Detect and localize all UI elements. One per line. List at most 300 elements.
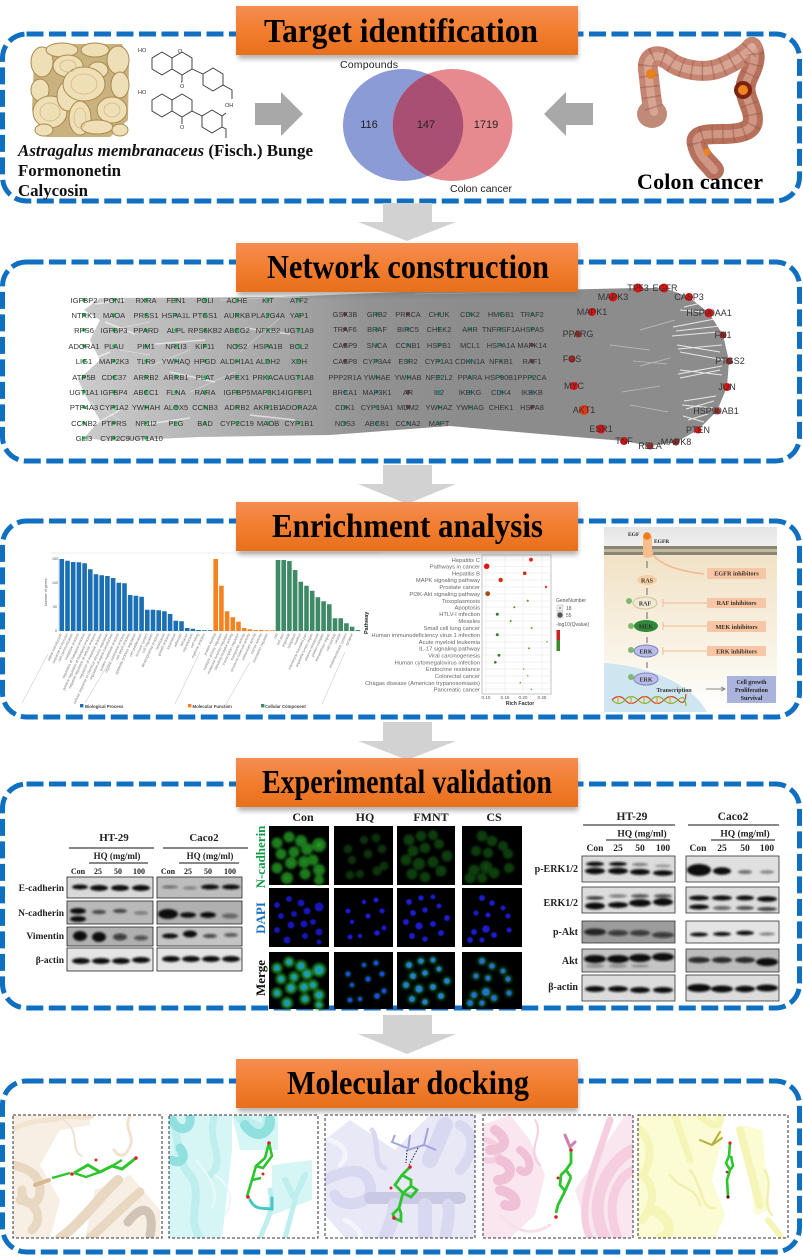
bubble chart: KEGG pathways: 0.25 [538, 695, 547, 700]
gene labels: compounds block: IGFBP5 [223, 388, 251, 397]
heading: Experimental validation: Experimental validation [262, 764, 552, 801]
western blot: ERK and Akt signalling: 50 [740, 844, 750, 854]
gene labels: compounds block: NFKB2 [256, 326, 280, 335]
bar chart: GO enrichment: 50 [53, 605, 57, 609]
western blot: EMT markers: 50 [204, 867, 212, 876]
chemical structures: formononetin and calycosin: HO [138, 48, 147, 54]
gene labels: middle block: TRAF6 [333, 325, 357, 334]
heading: Molecular docking [236, 1059, 578, 1112]
gene labels: middle block: CASP8 [333, 357, 357, 366]
bubble legend [556, 598, 589, 628]
bars: molecular function [213, 559, 275, 631]
gene labels: compounds block: IGFBP3 [100, 326, 128, 335]
gene labels: compounds block: PLA2G4A [251, 311, 286, 320]
gene labels: middle block: BRCA1 [333, 388, 357, 397]
gene nodes: middle block [345, 314, 532, 423]
immunofluorescence grid: Merge [253, 960, 268, 996]
western blot: EMT markers: HT-29 [99, 832, 129, 844]
gene labels: compounds block: ATP5B [72, 373, 96, 382]
gene labels: compounds block: ATF2 [290, 296, 308, 305]
gene labels: compounds block: UGT1A1 [69, 388, 99, 397]
chemical structures: formononetin and calycosin: OH [225, 103, 233, 109]
heading: Network construction [236, 243, 578, 296]
gene labels: compounds block: NOS2 [227, 342, 247, 351]
axis category labels: adhesion [173, 633, 183, 648]
bubble chart: KEGG pathways: 0.15 [501, 695, 510, 700]
pathway diagram: EGFR signalling: Survival [741, 696, 763, 702]
gene labels: middle block: YWHAZ [426, 403, 453, 412]
gene labels: middle block: CHUK [429, 310, 450, 319]
arrow: right [255, 92, 303, 136]
photo: Astragalus slices [31, 43, 129, 137]
gene labels: compounds block: YAP1 [290, 311, 308, 320]
axis category labels: organelle lumen region [295, 633, 314, 668]
axis category labels: cell death process [115, 633, 131, 661]
western blot: EMT markers: 25 [184, 867, 192, 876]
gene labels: compounds block: PIM1 [137, 342, 155, 351]
pathway diagram: EGFR signalling: ERK inhibitors [716, 648, 757, 656]
axis category labels: endomembrane system [328, 633, 348, 668]
bubble chart: KEGG pathways: Chagas disease (American trypanosomiasis) [365, 681, 480, 687]
chemical structures: formononetin and calycosin [138, 48, 233, 138]
western blot: ERK and Akt signalling: 100 [760, 844, 774, 854]
heading: Target identification [236, 6, 578, 59]
western blot: EMT markers: E-cadherin [19, 884, 65, 894]
western blot: ERK and Akt signalling: 100 [656, 844, 670, 854]
axis category labels: cell communication [57, 633, 74, 662]
gene labels: middle block: MAPT [429, 419, 450, 428]
western blot: EMT markers: Con [71, 867, 86, 876]
gene labels: compounds block: ADRB2 [224, 403, 250, 412]
network graph [68, 283, 745, 451]
bubble legend: 18 [566, 606, 572, 612]
axis category labels: synapse [345, 633, 354, 647]
axis category labels: organic substance process [104, 633, 126, 673]
axis category labels: carrier activity [250, 633, 263, 655]
bubble chart: KEGG pathways: MAPK signaling pathway [416, 578, 480, 584]
gene labels: compounds block: HSPA1L [162, 311, 190, 320]
bars: biological process [60, 559, 212, 631]
gene labels: compounds block: BAD [197, 419, 213, 428]
axis category labels: negative regulation of cellular process [68, 633, 97, 689]
arrow: transcription to outcome [706, 687, 725, 691]
panel: molecular docking [2, 1081, 800, 1252]
immunofluorescence grid: FMNT [413, 810, 449, 824]
hub gene labels: HSP90AA1 [686, 308, 732, 318]
gene labels: compounds block: PTPRS [101, 419, 127, 428]
axis category labels: cellular response to chemical stimulus regulation [73, 633, 109, 704]
gene labels: compounds block: TLR9 [137, 357, 155, 366]
gene labels: middle block: CYP1A1 [425, 357, 453, 366]
arrow: enrichment to validation [358, 722, 456, 760]
gene labels: middle block: YWHAB [394, 373, 422, 382]
bubble chart: KEGG pathways: Small cell lung cancer [424, 626, 480, 632]
signalling nodes: RAS [641, 578, 654, 584]
western blot: ERK and Akt signalling: HT-29 [617, 811, 648, 823]
axis category labels: vesicle [334, 633, 342, 644]
hub gene labels: JUN [718, 382, 736, 392]
gene labels: middle block: MDM2 [397, 403, 419, 412]
western blot: EMT markers: N-cadherin [18, 909, 65, 919]
bubble chart: KEGG pathways: Apoptosis [455, 606, 480, 612]
pathway diagram: EGFR signalling: Cell growth [736, 680, 767, 686]
arrow: left [544, 92, 593, 136]
heading: Enrichment analysis [236, 502, 578, 555]
bubble chart: KEGG pathways: IL-17 signaling pathway [419, 646, 480, 652]
gene labels: compounds block: ABCG2 [224, 326, 250, 335]
axis category labels: transporter activity [230, 633, 246, 661]
hub gene labels: MAPK3 [598, 292, 628, 302]
gene labels: compounds block: ARRB2 [133, 373, 159, 382]
label: Colon cancer: Colon cancer [637, 169, 763, 194]
signalling nodes: MEK [639, 624, 653, 630]
signalling nodes: ERK [639, 678, 653, 684]
axis category labels [47, 632, 354, 704]
gene labels: compounds block: UGT1A8 [284, 373, 314, 382]
row: DAPI [274, 894, 512, 944]
gene labels: middle block: CYP3A4 [363, 357, 391, 366]
arrow: validation to docking [358, 1015, 456, 1054]
row: Merge [274, 958, 512, 1008]
gene labels: compounds block: IGFBP2 [70, 296, 98, 305]
gene labels: compounds block: MAP2K3 [99, 357, 129, 366]
signalling nodes: Transcription [656, 688, 692, 694]
gene labels: compounds block: ADORA1 [68, 342, 100, 351]
hub gene labels: HSP90AB1 [693, 406, 739, 416]
gene labels: compounds block: UGT1A10 [129, 434, 163, 443]
gene labels: compounds block: AKR1B1 [253, 403, 283, 412]
axis category labels: nucleus [293, 633, 302, 646]
axis category labels: positive regulation of biological process [62, 633, 92, 691]
gene labels: middle block: NFE2L2 [425, 373, 453, 382]
gene labels: middle block: AR [403, 388, 413, 397]
western blot: ERK and Akt signalling: Con [587, 844, 604, 854]
hub gene labels: PTEN [686, 425, 710, 435]
bubble chart: KEGG pathways: PI3K-Akt signaling pathway [409, 592, 480, 598]
venn diagram: 1719 [474, 119, 498, 131]
gene labels: compounds block: PLG [168, 419, 184, 428]
gene labels: compounds block: GLI3 [76, 434, 92, 443]
gene nodes: compounds block [84, 300, 299, 438]
immunofluorescence grid: Con [292, 810, 314, 824]
gene labels: middle block: TNFRSF1A [482, 325, 520, 334]
western blot: EMT markers: 100 [133, 867, 145, 876]
gene labels: middle block: MAPK14 [517, 341, 547, 350]
axis category labels: plasma membrane [304, 633, 320, 661]
gene labels: compounds block [68, 296, 318, 443]
docking pose 2 [169, 1115, 318, 1238]
legend: Molecular Function [192, 704, 232, 709]
western blot: ERK and Akt signalling [535, 811, 779, 1001]
bubble chart: KEGG pathways: Acute myeloid leukemia [419, 640, 481, 646]
axis category labels: organelle [281, 633, 291, 648]
pathway diagram: EGFR signalling: RAF inhibitors [717, 600, 757, 607]
pathway diagram: EGFR signalling [604, 527, 777, 712]
hub gene labels: TNF [615, 436, 633, 446]
gene labels: middle block: CDK4 [491, 388, 511, 397]
gene labels: compounds block: PPARD [133, 326, 159, 335]
gene labels: middle block: CDK2 [460, 310, 480, 319]
nucleus [604, 663, 707, 712]
gene labels: compounds block: MAOA [103, 311, 126, 320]
bubble legend: GeneNumber [556, 598, 586, 604]
gene labels: middle block [328, 310, 547, 428]
gene labels: middle block: IKBKB [521, 388, 543, 397]
gene labels: middle block: CCNA2 [395, 419, 421, 428]
gene labels: compounds block: YWHAH [132, 403, 160, 412]
gene labels: middle block: YWHAE [363, 373, 391, 382]
axis category labels: regulation of signal transduction [89, 633, 114, 680]
gene labels: middle block: HSPA8 [520, 403, 544, 412]
axis category labels: translation regulator [252, 632, 269, 663]
arrow: network to enrichment [358, 465, 456, 504]
hub gene labels: ESR1 [589, 424, 613, 434]
gene labels: middle block: YWHAG [456, 403, 484, 412]
bubble chart: KEGG pathways: Viral carcinogenesis [428, 654, 480, 660]
gene labels: compounds block: ARRB1 [163, 373, 189, 382]
bubble chart: KEGG pathways: Hepatitis B [452, 572, 480, 578]
axis category labels: developmental process [141, 633, 160, 668]
gene labels: compounds block: RPS6 [74, 326, 94, 335]
western blot: EMT markers: 50 [114, 867, 122, 876]
outcome box [727, 676, 776, 703]
gene labels: middle block: MAP3K1 [362, 388, 392, 397]
receptor [643, 536, 652, 558]
axis category labels: reproduction [182, 633, 194, 653]
hub gene labels: FOS [563, 354, 581, 364]
bar chart: GO enrichment: Number of genes [44, 578, 48, 606]
arrow: target identification to network [358, 203, 456, 241]
gene labels: compounds block: ALOX5 [164, 403, 188, 412]
axis category labels: rhythmic process [191, 633, 206, 659]
gene labels: compounds block: ACHE [226, 296, 248, 305]
gene labels: compounds block: MAP3K14 [251, 388, 285, 397]
gene labels: compounds block: IGFBP4 [100, 388, 128, 397]
bubble chart: KEGG pathways: Endocrine resistance [426, 667, 480, 673]
axis category labels: locomotion [166, 633, 177, 650]
gene labels: compounds block: AURKB [224, 311, 250, 320]
species and compound names: Astragalus membranaceus (Fisch.) Bunge [17, 141, 313, 160]
axis category labels: apoptotic process regulation [114, 633, 137, 675]
axis category labels: extracellular region [314, 633, 331, 662]
hub gene labels: TP53 [627, 283, 649, 293]
gene labels: compounds block: NR1I3 [165, 342, 187, 351]
gene labels: compounds block: HSPA1B [253, 342, 283, 351]
bubble chart: KEGG pathways: Measles [458, 619, 480, 625]
axis category labels: protein binding [203, 633, 217, 656]
gene labels: compounds block: KIF11 [195, 342, 215, 351]
legend [80, 704, 306, 709]
panel: network construction [2, 262, 800, 461]
bubble chart: KEGG pathways [364, 555, 589, 707]
immunofluorescence grid [253, 810, 522, 1009]
gene labels: compounds block: IGFBP1 [285, 388, 313, 397]
hub gene nodes [568, 284, 732, 450]
gene labels: compounds block: FEN1 [166, 296, 186, 305]
gene labels: middle block: SNCA [367, 341, 387, 350]
gene labels: middle block: ESR2 [398, 357, 418, 366]
heading: Network construction: Network construction [267, 249, 549, 286]
hub gene labels: CASP3 [674, 292, 704, 302]
gene labels: compounds block: PRSS1 [134, 311, 158, 320]
docking pose 1 [13, 1115, 162, 1238]
gene labels: compounds block: PTGS1 [193, 311, 217, 320]
gene labels: middle block: IL2 [434, 388, 444, 397]
venn diagram: 116 [360, 119, 378, 131]
bar chart: GO enrichment: 0 [55, 629, 57, 633]
docking pose 5 [638, 1115, 788, 1238]
western blot: EMT markers: HQ (mg/ml) [187, 851, 233, 861]
gene labels: compounds block: PTP4A3 [70, 403, 98, 412]
bar chart: GO enrichment [22, 553, 381, 709]
pathway diagram: EGFR signalling: EGF [628, 532, 640, 538]
gene labels: compounds block: CYP2C19 [220, 419, 254, 428]
axis category labels: behavior [179, 632, 189, 647]
signalling nodes: ERK [639, 650, 653, 656]
gene labels: compounds block: ABCC1 [133, 388, 159, 397]
panel: experimental validation [2, 784, 800, 1009]
bubble chart: KEGG pathways: 0.10 [482, 695, 491, 700]
gene labels: compounds block: CDC37 [102, 373, 126, 382]
axis category labels: transcription regulator [222, 632, 240, 666]
gene labels: middle block: IKBKG [459, 388, 482, 397]
axis category labels: metabolic process [64, 633, 80, 661]
gene labels: middle block: NOS3 [335, 419, 355, 428]
gene labels: compounds block: PLAU [104, 342, 124, 351]
axis category labels: catalytic activity regulator [202, 632, 223, 671]
western blot: EMT markers: β-actin [36, 956, 65, 966]
bubble chart: KEGG pathways: 0.20 [519, 695, 528, 700]
bubble chart: KEGG pathways: Human cytomegalovirus infection [395, 660, 480, 666]
gene labels: compounds block: CYP1A2 [99, 403, 129, 412]
gene labels: middle block: GSK3B [333, 310, 357, 319]
gene labels: middle block: ABCB1 [365, 419, 389, 428]
western blot: ERK and Akt signalling: Con [690, 844, 707, 854]
gene labels: middle block: CDK1 [335, 403, 355, 412]
gene labels: middle block: CYP19A1 [361, 403, 393, 412]
western blot: ERK and Akt signalling: HQ (mg/ml) [720, 828, 770, 840]
gene labels: middle block: NFKB1 [489, 357, 513, 366]
hub gene labels: MYC [564, 381, 584, 391]
bubble chart: KEGG pathways: Human immunodeficiency virus 1 infection [371, 633, 480, 639]
western blot: ERK and Akt signalling: HQ (mg/ml) [617, 828, 667, 840]
bubble chart: KEGG pathways: Pancreatic cancer [434, 688, 480, 694]
bubble chart: KEGG pathways: Colorectal cancer [435, 674, 480, 680]
gene labels: middle block: RAF1 [523, 357, 541, 366]
bubble chart: KEGG pathways: HTLV-I infection [439, 612, 480, 618]
axis category labels: antioxidant activity [241, 633, 257, 661]
gene labels: middle block: PPP2CA [517, 373, 547, 382]
gene labels: compounds block: ADORA2A [281, 403, 318, 412]
gene labels: compounds block: YWHAQ [162, 357, 190, 366]
western blot: EMT markers: Con [161, 867, 176, 876]
heading: Target identification: Target identification [264, 13, 538, 50]
axis category labels: cell killing [190, 633, 200, 648]
DNA helix [612, 694, 686, 706]
immunofluorescence grid: CS [486, 810, 502, 824]
gene labels: middle block: PPP2R1A [328, 373, 362, 382]
inhibitor boxes [707, 568, 766, 656]
axis category labels: protein metabolic process [99, 633, 120, 672]
bubble chart: KEGG pathways: Pathways in cancer [430, 564, 480, 570]
gene labels: compounds block: BCL2 [290, 342, 308, 351]
chemical structures: formononetin and calycosin: HO [138, 90, 147, 96]
western blot: EMT markers: Vimentin [26, 932, 65, 942]
bar chart: GO enrichment: 100 [52, 581, 58, 585]
bubble chart: KEGG pathways: Rich Factor [506, 701, 534, 707]
gene labels: middle block: PPARA [458, 373, 482, 382]
gene labels: middle block: MCL1 [460, 341, 480, 350]
axis category labels: immune system [135, 633, 149, 657]
western blot: ERK and Akt signalling: Caco2 [718, 811, 749, 823]
bubble legend: 55 [566, 613, 572, 619]
hub gene labels [563, 283, 745, 451]
chemical structures: formononetin and calycosin: O [178, 49, 183, 55]
gene labels: middle block: CHEK2 [427, 325, 451, 334]
gene labels: compounds block: RPS6KB2 [188, 326, 222, 335]
heading: Experimental validation [236, 758, 578, 811]
western blot: EMT markers: 25 [94, 867, 102, 876]
axis category labels: signal transduction [47, 633, 63, 662]
species and compound names [17, 141, 313, 200]
hub gene labels: AKT1 [573, 405, 595, 415]
chemical structures: formononetin and calycosin: O [180, 84, 185, 90]
gene labels: compounds block: NTRK1 [72, 311, 96, 320]
bar chart: GO enrichment: 150 [52, 557, 58, 561]
gene labels: compounds block: PRKACA [252, 373, 285, 382]
signalling nodes [626, 561, 692, 694]
axis category labels: cell part [276, 633, 285, 646]
hub gene labels: EGFR [652, 283, 678, 293]
hub gene labels: MAPK1 [577, 307, 607, 317]
axis category labels: molecular function regulator [207, 632, 229, 675]
bubble chart: KEGG pathways: Hepatitis C [452, 558, 480, 564]
axis category labels: membrane-bounded part [288, 633, 308, 670]
western blot: ERK and Akt signalling: 25 [717, 844, 727, 854]
gene labels: compounds block: PLAT [196, 373, 215, 382]
western blot: ERK and Akt signalling: p-ERK1/2 [535, 864, 578, 875]
docking pose 3 [325, 1115, 475, 1238]
gene labels: compounds block: RARA [194, 388, 216, 397]
hub gene labels: RELA [638, 441, 662, 451]
axis category labels: structural molecule activity [229, 633, 251, 673]
gene labels: compounds block: RXRA [135, 296, 157, 305]
chemical structures: formononetin and calycosin: O [180, 125, 185, 131]
pathway diagram: EGFR signalling: MEK inhibitors [715, 624, 758, 631]
axis category labels: growth process [157, 633, 171, 657]
axis category labels: regulation of biological process [61, 633, 86, 679]
gene labels: middle block: PRKCA [395, 310, 421, 319]
legend: Biological Process [85, 704, 124, 709]
gene labels: compounds block: ALPL [167, 326, 185, 335]
gene labels: compounds block: CCNB2 [71, 419, 97, 428]
panel: enrichment analysis [2, 521, 800, 717]
docking pose 4 [483, 1115, 633, 1238]
western blot: ERK and Akt signalling: β-actin [548, 982, 578, 993]
gene labels: middle block: AHR [462, 325, 478, 334]
axis category labels: cell [273, 633, 279, 639]
gene labels: middle block: HSPA5 [520, 325, 544, 334]
bubble chart: KEGG pathways: Pathway [364, 611, 370, 634]
western blot: EMT markers: 100 [224, 867, 236, 876]
gene labels: compounds block: FLNA [166, 388, 187, 397]
axis category labels: localization [155, 633, 166, 651]
bubble legend: -log10(Qvalue) [556, 622, 589, 628]
pathway diagram: EGFR signalling: EGFR inhibitors [714, 570, 759, 578]
hub gene labels: FN1 [714, 330, 732, 340]
axis category labels: response to stimulus [51, 633, 69, 664]
western blot: ERK and Akt signalling: Akt [562, 956, 579, 967]
